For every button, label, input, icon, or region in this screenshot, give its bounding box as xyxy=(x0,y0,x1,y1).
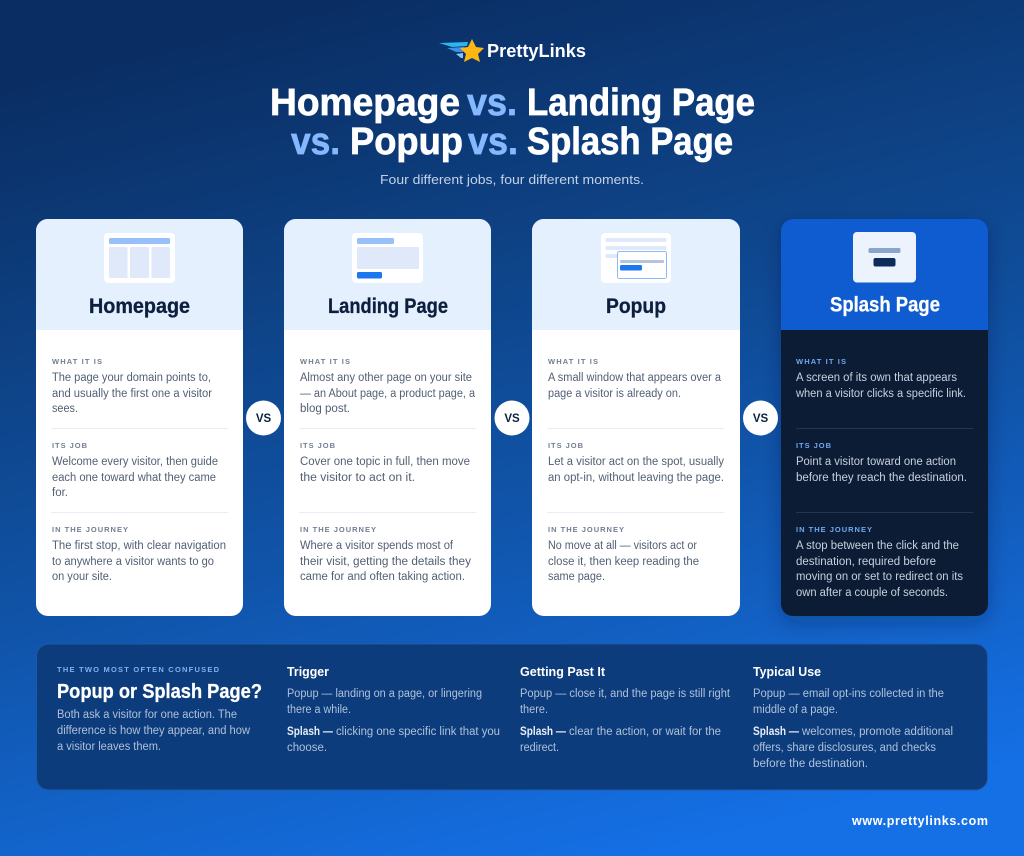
title: Homepage xyxy=(270,82,460,124)
section: its job xyxy=(548,441,724,484)
intro block: Both ask a visitor for one action. The xyxy=(57,709,237,721)
section: its job xyxy=(300,441,470,484)
section: what it is: WHAT IT IS xyxy=(796,357,846,366)
section: in the journey: to anywhere a visitor wants to go xyxy=(52,556,214,568)
badge: vs 2 xyxy=(494,400,530,436)
logo: PrettyLinks: PrettyLinks xyxy=(487,40,586,61)
column: getting past it: Getting Past It xyxy=(520,664,606,679)
section: its job: each one toward what they came xyxy=(52,472,216,484)
section: in the journey: came for and often taking action. xyxy=(300,571,465,583)
column: getting past it: redirect. xyxy=(520,742,559,754)
section: what it is xyxy=(795,357,966,400)
section: what it is: A small window that appears over a xyxy=(548,372,722,384)
column: trigger: Trigger xyxy=(287,664,329,679)
title: Popup xyxy=(350,121,463,163)
section: its job: before they reach the destination. xyxy=(796,472,967,484)
section: its job: Cover one topic in full, then move xyxy=(300,456,470,468)
logo: PrettyLinks xyxy=(439,39,586,62)
section: its job: ITS JOB xyxy=(796,441,832,450)
badge: vs 1 xyxy=(246,400,281,436)
section: what it is: The page your domain points to, xyxy=(52,372,211,384)
panel: Popup xyxy=(532,219,740,616)
column: getting past it: Splash — xyxy=(520,726,566,738)
icon: splash layout xyxy=(853,232,916,282)
section: its job xyxy=(796,441,967,484)
column: typical use: Typical Use xyxy=(753,664,821,679)
section: in the journey xyxy=(796,525,963,599)
column: trigger: there a while. xyxy=(287,704,351,716)
section: in the journey: IN THE JOURNEY xyxy=(548,525,624,534)
badge: vs 2: VS xyxy=(504,413,520,425)
section: in the journey: IN THE JOURNEY xyxy=(52,525,128,534)
column: typical use: Popup — email opt-ins collected in the xyxy=(753,688,944,700)
title: Splash Page xyxy=(527,121,733,163)
section: in the journey xyxy=(52,525,226,583)
column: typical use: Splash — xyxy=(753,726,799,738)
intro block xyxy=(57,665,262,753)
section: in the journey: IN THE JOURNEY xyxy=(300,525,376,534)
section: its job: ITS JOB xyxy=(300,441,336,450)
section: in the journey: moving on or set to redirect on its xyxy=(796,571,963,583)
section: in the journey: Where a visitor spends most of xyxy=(300,540,454,552)
section: what it is: A screen of its own that appears xyxy=(796,372,957,384)
title: vs. xyxy=(468,121,518,163)
heading: Homepage: Homepage xyxy=(89,295,190,318)
intro block: Popup or Splash Page? xyxy=(57,681,262,703)
section: its job: ITS JOB xyxy=(548,441,584,450)
column: getting past it: there. xyxy=(520,704,548,716)
section: in the journey: The first stop, with clear navigation xyxy=(52,540,226,552)
section: what it is: blog post. xyxy=(300,403,350,415)
intro block: a visitor leaves them. xyxy=(57,741,161,753)
panel: comparison xyxy=(36,644,988,790)
column: getting past it: Popup — close it, and the page is still right xyxy=(520,688,731,700)
column: getting past it xyxy=(520,664,731,754)
subtitle: Four different jobs, four different moments. xyxy=(380,172,644,187)
badge: vs 1: VS xyxy=(256,413,271,425)
section: what it is: when a visitor clicks a specific link. xyxy=(795,388,966,400)
section: what it is: and usually the first one a visitor xyxy=(52,388,212,400)
section: what it is: sees. xyxy=(52,403,78,415)
column: trigger: Splash — xyxy=(287,726,333,738)
section: in the journey: own after a couple of seconds. xyxy=(796,587,948,599)
column: typical use: welcomes, promote additional xyxy=(801,726,953,738)
badge: vs 3 xyxy=(743,400,778,436)
icon: homepage layout xyxy=(104,233,175,283)
section: its job: an opt-in, without leaving the page. xyxy=(548,472,724,484)
column: trigger: choose. xyxy=(287,742,327,754)
column: typical use xyxy=(753,664,953,770)
section: what it is xyxy=(548,357,722,400)
section: its job: Point a visitor toward one action xyxy=(796,456,956,468)
panel: Landing Page xyxy=(284,219,491,616)
section: its job: for. xyxy=(52,487,68,499)
column: trigger: Popup — landing on a page, or lingering xyxy=(287,688,482,700)
section: what it is: WHAT IT IS xyxy=(548,357,598,366)
section: its job: Welcome every visitor, then guide xyxy=(52,456,218,468)
intro block: difference is how they appear, and how xyxy=(57,725,251,737)
section: in the journey: A stop between the click and the xyxy=(796,540,959,552)
icon: landing page layout xyxy=(352,233,423,283)
panel: Homepage xyxy=(36,219,243,616)
section: what it is xyxy=(300,357,476,415)
section: what it is: WHAT IT IS xyxy=(300,357,350,366)
section: what it is: page a visitor is already on. xyxy=(548,388,681,400)
section: what it is: — an About page, a product page, a xyxy=(300,388,476,400)
section: in the journey: destination, required before xyxy=(796,556,936,568)
column: trigger xyxy=(287,664,500,754)
section: in the journey: No move at all — visitors act or xyxy=(548,540,697,552)
title: Landing Page xyxy=(527,82,755,124)
icon: popup layout xyxy=(601,233,671,283)
section: in the journey: close it, then keep reading the xyxy=(548,556,699,568)
section: in the journey: IN THE JOURNEY xyxy=(796,525,872,534)
section: its job: Let a visitor act on the spot, usually xyxy=(548,456,724,468)
section: its job xyxy=(52,441,218,499)
title: vs. xyxy=(291,121,340,163)
column: typical use: middle of a page. xyxy=(753,704,838,716)
panel: Splash Page xyxy=(781,219,988,616)
section: its job: ITS JOB xyxy=(52,441,88,450)
section: what it is: WHAT IT IS xyxy=(52,357,102,366)
section: what it is: Almost any other page on your site xyxy=(300,372,472,384)
heading: Splash Page: Splash Page xyxy=(830,294,940,316)
intro block: THE TWO MOST OFTEN CONFUSED xyxy=(57,665,220,674)
title xyxy=(270,82,755,163)
column: trigger: clicking one specific link that you xyxy=(336,726,500,738)
heading: Landing Page: Landing Page xyxy=(328,295,448,318)
heading: Popup: Popup xyxy=(606,295,666,318)
section: in the journey: same page. xyxy=(548,571,605,583)
title: vs. xyxy=(467,82,517,124)
column: typical use: offers, share disclosures, and checks xyxy=(753,742,936,754)
footer url: www.prettylinks.com xyxy=(851,814,988,828)
section: in the journey xyxy=(548,525,699,583)
column: getting past it: clear the action, or wait for the xyxy=(569,726,721,738)
section: its job: the visitor to act on it. xyxy=(300,472,415,484)
section: what it is xyxy=(52,357,212,415)
section: in the journey: on your site. xyxy=(52,571,112,583)
section: in the journey: their visit, getting the details they xyxy=(300,556,471,568)
section: in the journey xyxy=(300,525,471,583)
column: typical use: before the destination. xyxy=(753,758,868,770)
badge: vs 3: VS xyxy=(753,413,768,425)
